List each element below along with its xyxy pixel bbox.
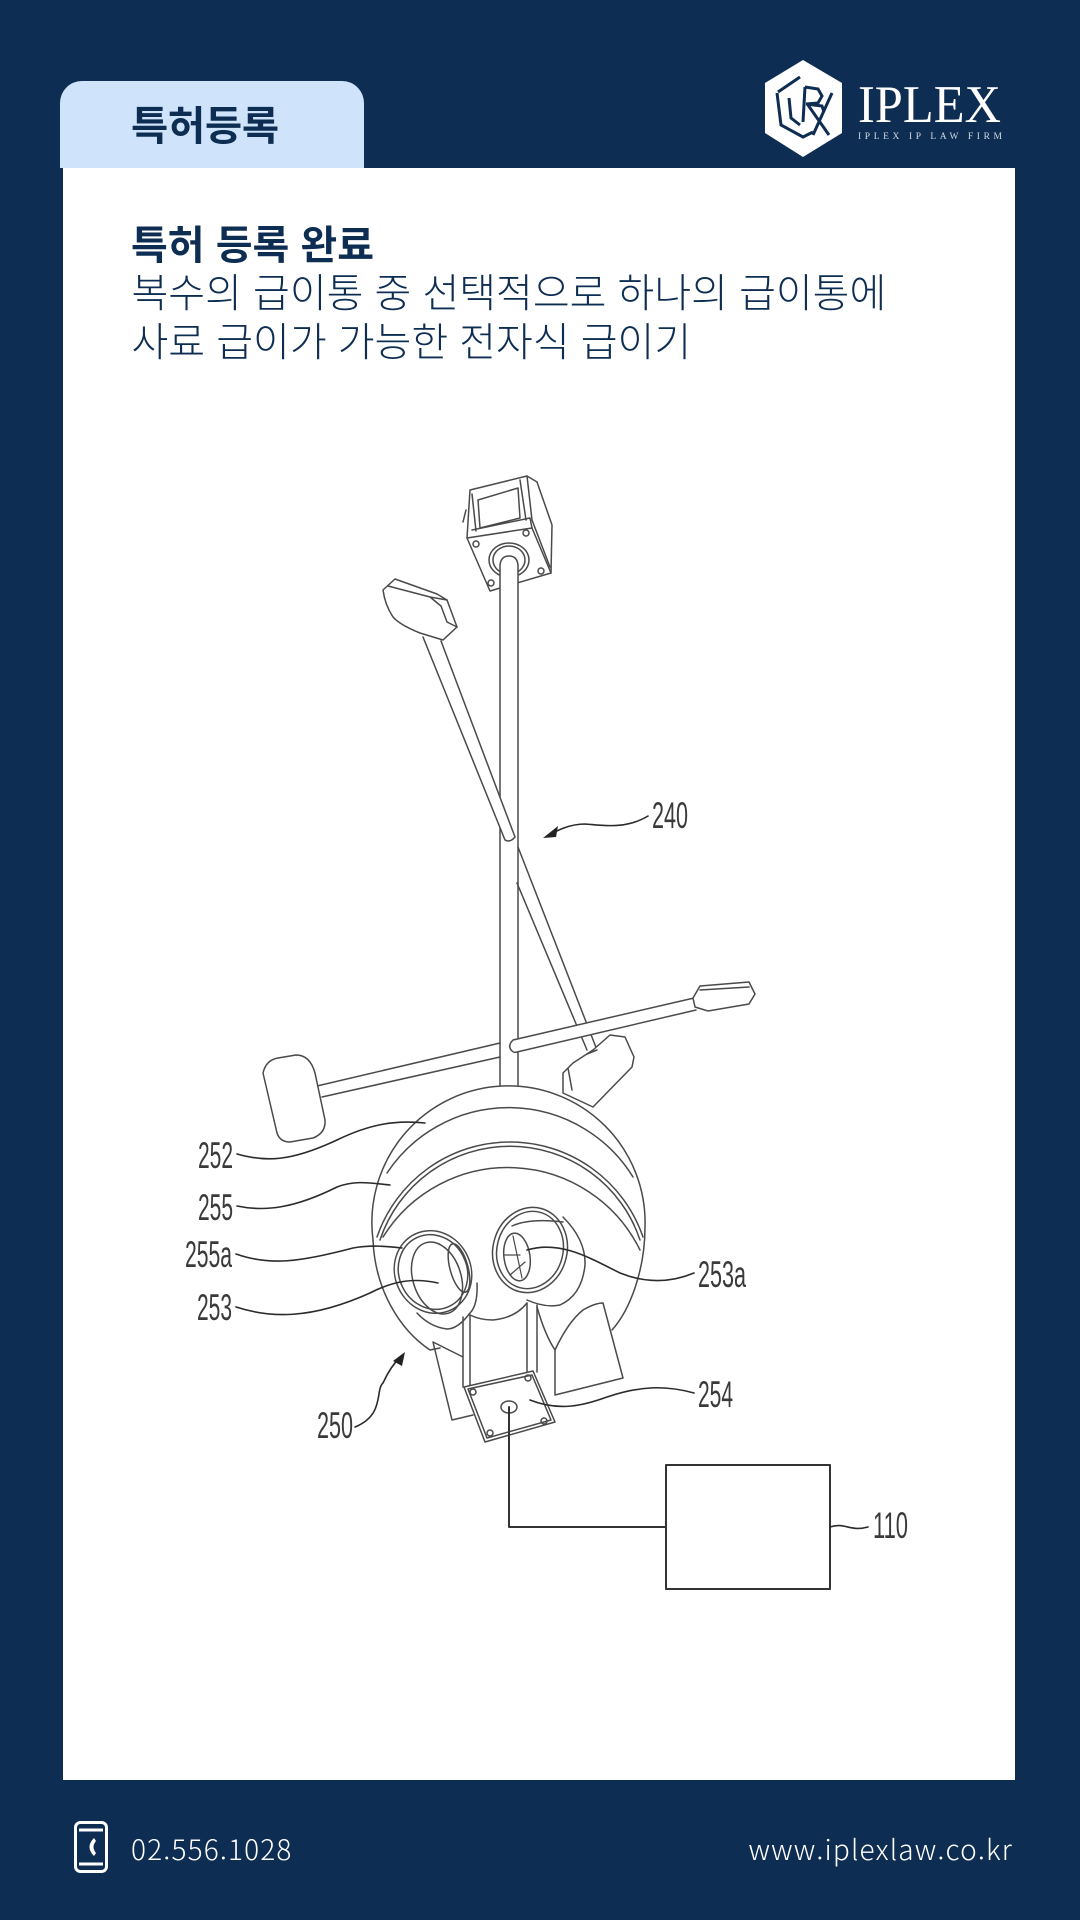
tab: category [60, 81, 364, 168]
tab label: 특허등록 [131, 103, 279, 149]
arrowheads [393, 826, 558, 1366]
icon: phone [74, 1821, 108, 1873]
heading: patent registered: 특허 등록 완료 [131, 224, 374, 268]
phone number: 02.556.1028 [131, 1829, 293, 1869]
panel: white content [63, 168, 1015, 1780]
reference numerals: 252 [198, 1135, 233, 1176]
description text: 복수의 급이통 중 선택적으로 하나의 급이통에 [132, 272, 886, 316]
reference numerals: 250 [317, 1405, 353, 1446]
logo: IPLEX [765, 60, 1003, 157]
logo wordmark: IPLEX [858, 76, 1001, 134]
mounting plate [464, 1371, 555, 1442]
reference numerals: 253 [197, 1287, 232, 1328]
right cup [470, 1199, 585, 1320]
lower-right paddle [563, 1035, 634, 1107]
control box [666, 1465, 830, 1589]
reference numerals [185, 795, 908, 1546]
logo subtitle: IPLEX IP LAW FIRM [858, 132, 1003, 142]
description text: 사료 급이가 가능한 전자식 급이기 [132, 320, 691, 364]
reference numerals: 255 [198, 1187, 233, 1228]
reference numerals: 254 [698, 1374, 733, 1415]
upper-left paddle and arm [383, 579, 597, 1050]
website: www.iplexlaw.co.kr [748, 1829, 1013, 1869]
motor [463, 476, 552, 591]
reference numerals: 240 [652, 795, 688, 836]
wiring [509, 1407, 666, 1527]
neck and fins [433, 1303, 623, 1420]
left horizontal arm and paddle [263, 1043, 500, 1142]
leader lines [236, 816, 868, 1528]
reference numerals: 253a [698, 1254, 746, 1295]
left cup [381, 1218, 485, 1329]
shaft [500, 556, 518, 1085]
feeder body [372, 1086, 645, 1350]
reference numerals: 255a [185, 1234, 232, 1275]
icon: hexagon emblem [765, 60, 842, 157]
reference numerals: 110 [873, 1505, 908, 1546]
right horizontal arm and paddle [510, 982, 755, 1052]
description text [132, 272, 886, 364]
